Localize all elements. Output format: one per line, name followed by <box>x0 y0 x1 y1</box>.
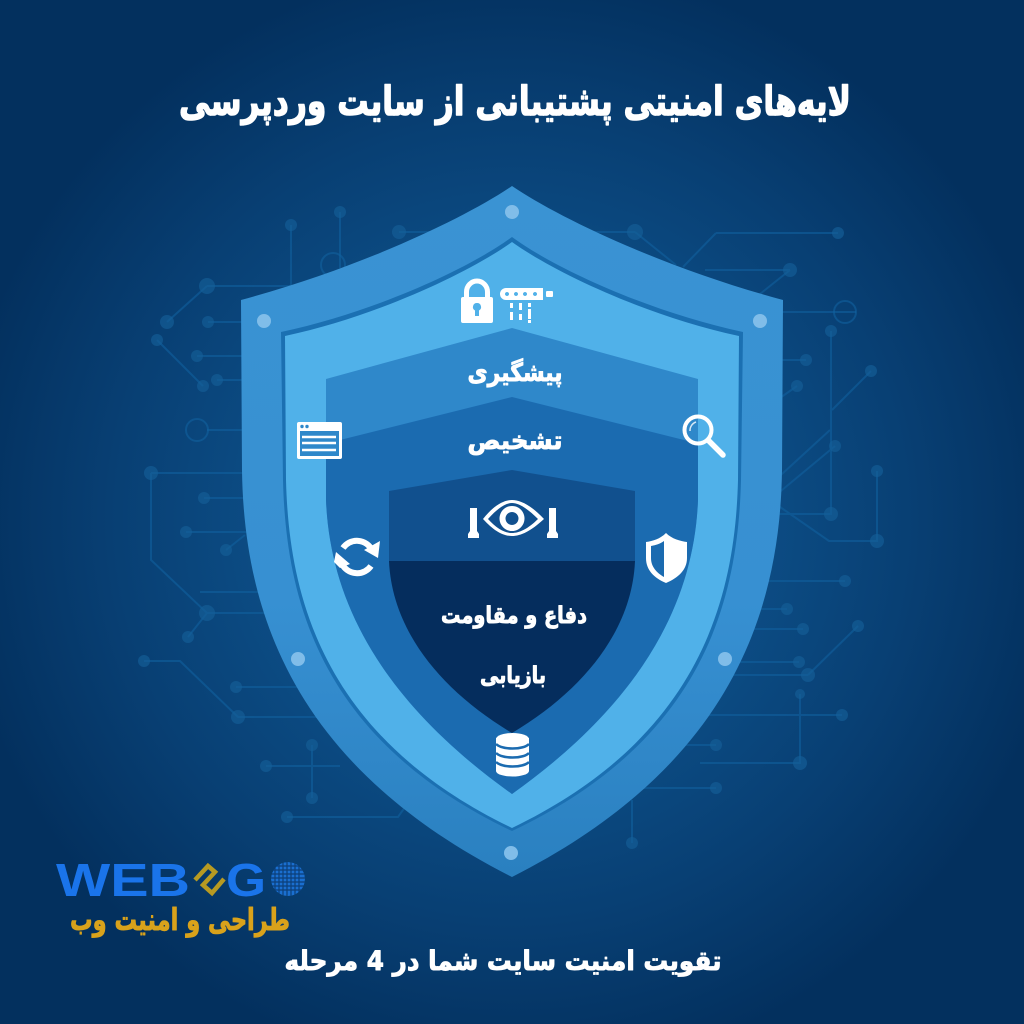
layer: defence lower <box>389 561 635 733</box>
logo globe <box>271 862 305 896</box>
shield <box>241 186 783 877</box>
icon: database <box>496 733 529 776</box>
layer: prevention <box>326 328 698 794</box>
footer tagline: تقویت امنیت سایت شما در 4 مرحله <box>284 946 722 977</box>
icon: small shield <box>646 533 687 583</box>
logo link symbol <box>195 866 224 893</box>
logo letter G: G <box>226 854 266 906</box>
circuit board pattern <box>138 206 884 849</box>
icon: browser window <box>297 422 342 459</box>
layer: light band <box>285 242 739 828</box>
logo <box>56 854 305 938</box>
logo tagline: طراحی و امنیت وب <box>70 903 290 938</box>
icon: magnifier <box>684 416 723 455</box>
text: detection: تشخیص <box>468 426 562 455</box>
icon: refresh <box>334 541 380 573</box>
logo wordmark WEB: WEB <box>56 854 190 906</box>
rivets <box>257 205 767 860</box>
layer: defence upper <box>389 470 635 561</box>
text: prevention: پیشگیری <box>468 358 562 388</box>
text: recovery: بازیابی <box>480 663 546 689</box>
icon: eye with pillars <box>468 500 558 538</box>
shield outer ring <box>241 186 783 877</box>
icon: padlock <box>461 281 493 323</box>
text: defence and resistance: دفاع و مقاومت <box>441 603 587 629</box>
icon: keypad with data rain <box>500 288 553 323</box>
title: لایه‌های امنیتی پشتیبانی از سایت وردپرسی <box>179 79 851 125</box>
shield ring line <box>281 237 743 831</box>
layer: detection <box>320 397 704 800</box>
